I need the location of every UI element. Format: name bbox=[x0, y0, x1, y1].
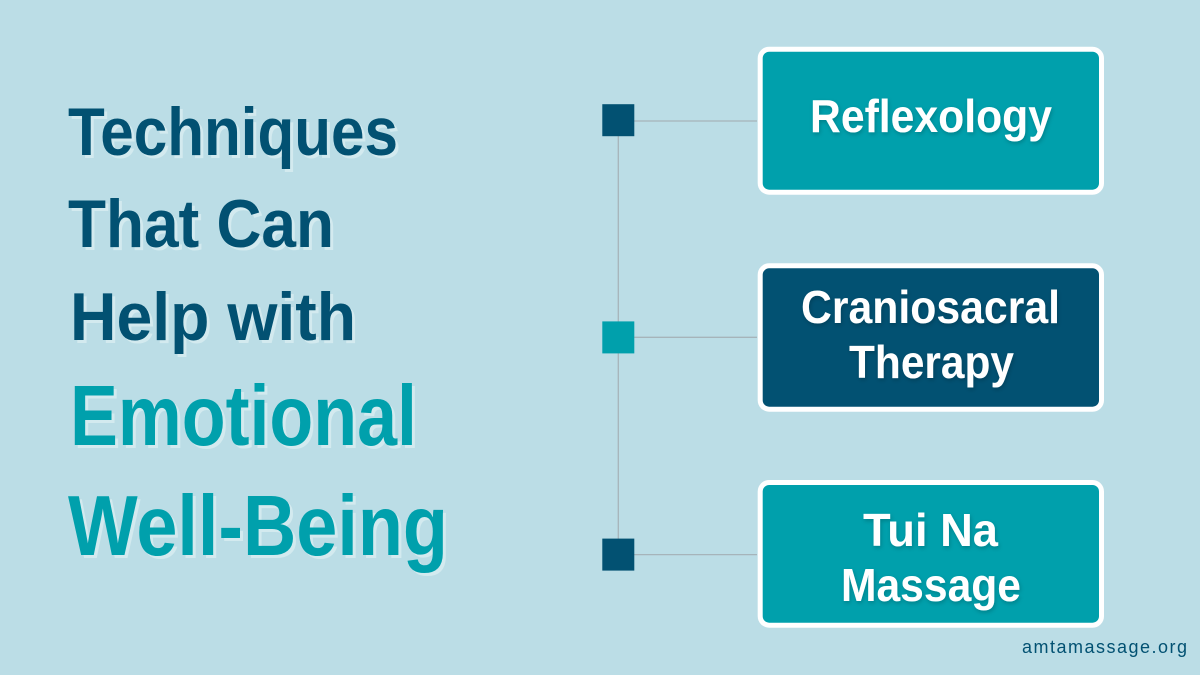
source url: amtamassage.org bbox=[1022, 637, 1187, 657]
title line: Emotional: Emotional bbox=[73, 372, 420, 467]
title line: Help with: Help with bbox=[73, 282, 359, 358]
title line: Techniques: Techniques bbox=[71, 97, 401, 173]
connector lines bbox=[618, 120, 757, 555]
title line: Help with: Help with bbox=[70, 279, 356, 355]
box label bbox=[841, 504, 1021, 611]
box label: Craniosacral bbox=[801, 281, 1060, 333]
box: Craniosacral Therapy bbox=[760, 266, 1102, 409]
title bbox=[68, 94, 451, 577]
title line: Emotional: Emotional bbox=[70, 369, 417, 464]
title line: Techniques: Techniques bbox=[68, 94, 398, 170]
title line: Well-Being: Well-Being bbox=[71, 482, 451, 577]
box label: Reflexology bbox=[810, 90, 1052, 142]
title line: Well-Being: Well-Being bbox=[68, 479, 448, 574]
title line: That Can: That Can bbox=[71, 189, 337, 265]
box label: Tui Na bbox=[863, 504, 998, 556]
marker: craniosacral therapy bbox=[602, 321, 634, 353]
marker: tui na massage bbox=[602, 539, 634, 571]
box label: Massage bbox=[841, 559, 1021, 611]
box: Reflexology bbox=[760, 49, 1102, 192]
marker: reflexology bbox=[602, 104, 634, 136]
title line: That Can: That Can bbox=[68, 186, 334, 262]
box: Tui Na Massage bbox=[760, 482, 1102, 625]
box label: Therapy bbox=[849, 336, 1014, 388]
box label bbox=[801, 281, 1060, 388]
